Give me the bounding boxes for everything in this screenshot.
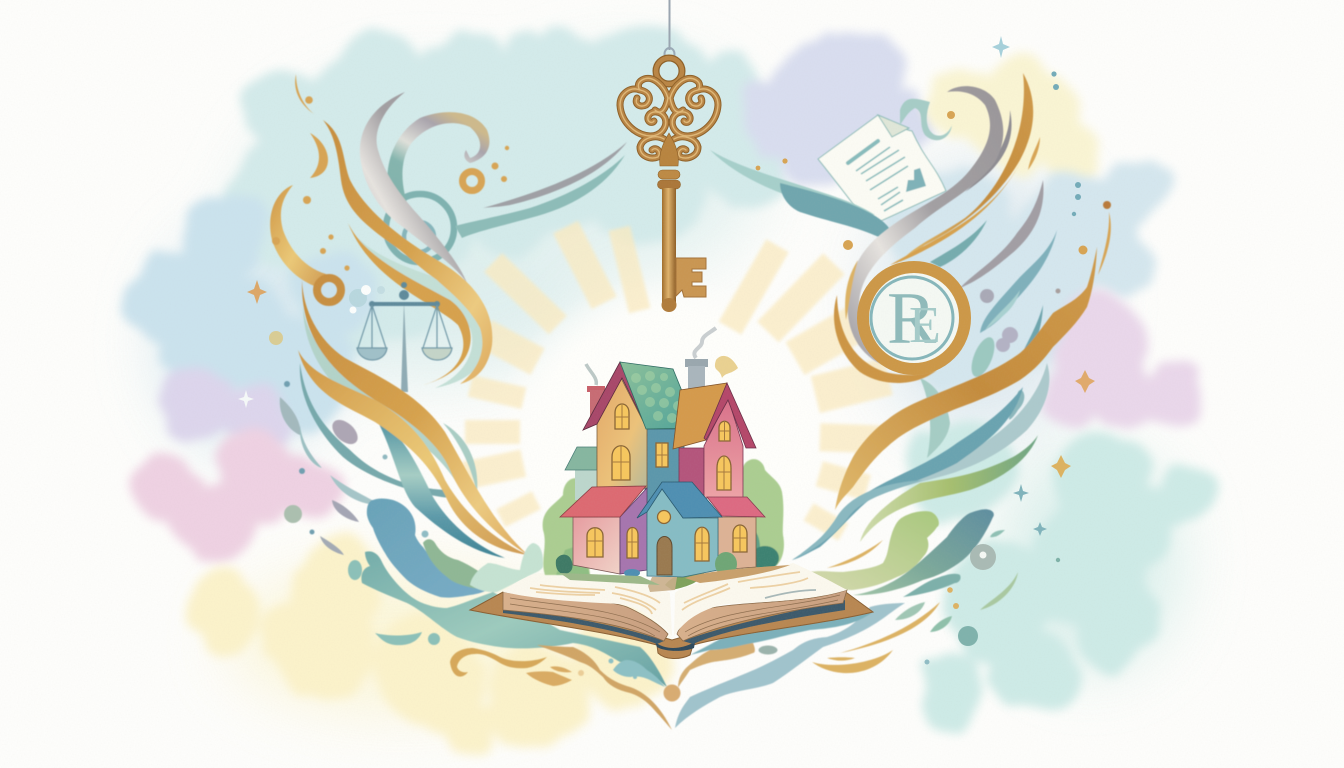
- ribbon: pale strand: [710, 150, 875, 215]
- ribbon: teal behind seal: [930, 220, 987, 267]
- ribbon: pale teal arc right of gold: [443, 423, 477, 493]
- wash: top right lilac: [751, 33, 930, 187]
- wash: right blue: [885, 163, 1162, 395]
- book: left page block: [503, 592, 668, 641]
- wash: central glow: [490, 275, 850, 605]
- ribbon: gold swept top: [900, 73, 1033, 262]
- book: page block stripes: [510, 595, 840, 636]
- flourish: gold left scroll: [450, 648, 547, 677]
- house: purple side wall: [620, 488, 647, 574]
- ribbon: teal under book right: [675, 603, 905, 728]
- wash: top teal cloud: [225, 32, 795, 355]
- book: spine shadow: [655, 642, 695, 651]
- house: chimneys and smoke: [586, 328, 738, 420]
- house: small side wing: [565, 447, 597, 500]
- key: ring loop: [664, 48, 674, 60]
- ribbon: gold band over silver: [890, 150, 1026, 265]
- house: orange roof: [673, 383, 727, 449]
- house: right roof edge: [704, 383, 756, 448]
- house: foundation shrubs: [556, 552, 790, 585]
- book: right dark underside: [683, 600, 845, 644]
- seal: gold ring: [863, 267, 965, 369]
- ribbon: swirl from teal to silver: [387, 112, 489, 212]
- house: magenta wall: [679, 448, 704, 498]
- house: blue porch roof: [637, 482, 722, 518]
- ribbon: dark strand: [780, 183, 890, 238]
- book: grass: [665, 572, 705, 590]
- star: teal top right: [992, 36, 1010, 58]
- ribbon: sage band: [303, 305, 458, 485]
- ribbon: curl near document: [900, 99, 952, 140]
- house: center blue wall: [645, 429, 684, 522]
- trees: [543, 459, 784, 575]
- wash: soft colour bed: [160, 60, 1180, 710]
- ribbon: silver second strand: [965, 110, 1012, 192]
- ribbon: outer gold with ring: [270, 185, 341, 302]
- bubbles near scales: [349, 285, 385, 314]
- house: roof scales: [631, 371, 691, 425]
- star: gold lower right: [1051, 455, 1071, 478]
- house: lower right roof: [707, 497, 765, 517]
- house: red lower roof: [560, 486, 646, 517]
- house: steps: [648, 577, 677, 592]
- star: white left: [238, 390, 254, 408]
- house: dark gable edge: [583, 362, 650, 430]
- ribbon: long teal sweep: [300, 363, 450, 498]
- book: right page block: [677, 590, 847, 641]
- ribbon: long teal strand to key: [455, 155, 625, 238]
- ribbon: teal feathers: [967, 230, 1060, 419]
- seal: monogram: [887, 278, 941, 360]
- house: door: [657, 536, 672, 575]
- ribbon: silver main: [848, 86, 1003, 368]
- open book: [470, 563, 873, 659]
- ribbon: big teal under the book: [361, 551, 667, 687]
- wash: left blue cloud: [125, 195, 380, 425]
- ribbon: gold thin right: [1098, 212, 1111, 275]
- tree: right: [742, 459, 784, 570]
- left flowing ribbons, back layer: [270, 74, 509, 388]
- wash: top right yellow: [922, 60, 1107, 182]
- wash: right lilac pink: [1043, 297, 1209, 429]
- wash: left lilac: [162, 367, 295, 455]
- ribbon: pale green hills: [470, 543, 543, 592]
- ribbon: lower gold lower strand: [298, 350, 528, 555]
- key with string: [620, 0, 718, 312]
- ribbon: thin gold left of seal: [845, 260, 858, 320]
- ribbon: teal upper wave: [792, 480, 923, 560]
- book: left dark underside: [503, 608, 664, 644]
- ribbon: small crescent and curl: [272, 74, 350, 271]
- ribbon: gold inner S: [348, 223, 471, 385]
- ribbon: pale green inner: [352, 232, 487, 388]
- ribbon: pale gray-teal band: [860, 363, 1049, 500]
- tree: left: [543, 478, 590, 575]
- key: hanging string: [668, 0, 670, 50]
- house: windows: [587, 404, 747, 561]
- ribbons from key to document: [710, 150, 890, 238]
- flourish: gold leaves: [526, 666, 584, 686]
- flourish: gold ribbon to point: [537, 645, 672, 730]
- wash: right mint: [910, 420, 1215, 726]
- star: gold left: [247, 280, 267, 304]
- ribbon: small leaves: [895, 530, 1018, 632]
- flourish: inner teal: [613, 660, 665, 687]
- book: cover: [470, 590, 873, 659]
- key: bit: [676, 258, 706, 297]
- ribbon: teal leaf below fish: [903, 574, 961, 597]
- icon: document with lines and stamp: [818, 115, 946, 226]
- house: green roof: [620, 362, 697, 429]
- ribbon: small left blobs: [348, 560, 440, 645]
- ribbon: silver strand to key: [483, 142, 627, 208]
- wash: left pink: [131, 438, 337, 563]
- light rays behind the house: [462, 221, 893, 541]
- ribbon: dark teal band: [792, 387, 1023, 560]
- ribbon: teal band under cover: [690, 610, 873, 655]
- wash: bottom yellow: [183, 540, 670, 751]
- ribbon: silver right feather: [960, 180, 1043, 288]
- ribbon: gold lower leaves: [812, 602, 940, 673]
- key: collar and shaft: [658, 133, 680, 312]
- ribbon: lower gold upper strand: [302, 280, 528, 555]
- seal: teal inner ring: [871, 277, 953, 359]
- house: left gable wall: [597, 378, 647, 488]
- ribbon: gold main S: [323, 120, 492, 384]
- ribbon: outer gold crescent: [834, 295, 937, 383]
- watercolor wash background: [125, 32, 1215, 751]
- ribbon: green wave: [423, 539, 495, 588]
- left flowing ribbons, front layer: [280, 142, 667, 687]
- book: left page top: [503, 573, 672, 636]
- ribbon: small arcs and dots: [284, 381, 428, 538]
- ribbon: teal descending: [377, 420, 505, 558]
- bottom flourish: [450, 645, 680, 730]
- ribbon: green blob: [810, 511, 939, 590]
- decorative dots and stars: [238, 36, 1095, 664]
- house: window mullions: [587, 405, 747, 561]
- ribbon: blue wave: [367, 498, 493, 598]
- seal: letter E: E: [909, 297, 941, 354]
- book: right page top: [674, 563, 847, 636]
- seal ring with RE monogram: [863, 267, 965, 369]
- ribbon: gray ellipse: [758, 646, 778, 654]
- ribbon: teal fish: [853, 509, 994, 595]
- ribbon: leaves: [280, 397, 380, 555]
- ribbon: gold band under cover: [678, 643, 755, 688]
- icon: scales of justice: [357, 282, 452, 392]
- star: gold right: [1075, 370, 1095, 393]
- flourish: center drop: [664, 684, 680, 702]
- house: lower right tan wall: [718, 517, 756, 570]
- book: text lines: [530, 572, 816, 614]
- ribbon: gold big sweep: [835, 247, 1097, 510]
- key: ornate bow: [620, 58, 718, 158]
- ribbon: olive band: [860, 435, 1038, 542]
- house: lower left pink wall: [573, 517, 620, 574]
- seal: letter R: R: [887, 278, 937, 360]
- right flowing ribbons: [675, 73, 1111, 728]
- house: [556, 328, 790, 592]
- house: porch walls: [647, 488, 718, 577]
- ribbon: ring and dots upper right: [462, 146, 509, 190]
- dots scatter: [269, 71, 1088, 664]
- ribbon: silver swirl: [360, 92, 467, 283]
- house: pink right wall: [704, 398, 743, 498]
- star: teal small right: [1013, 484, 1029, 502]
- ribbon: gold thin under sweep: [827, 540, 883, 568]
- ribbon: teal loop with rings: [386, 194, 454, 262]
